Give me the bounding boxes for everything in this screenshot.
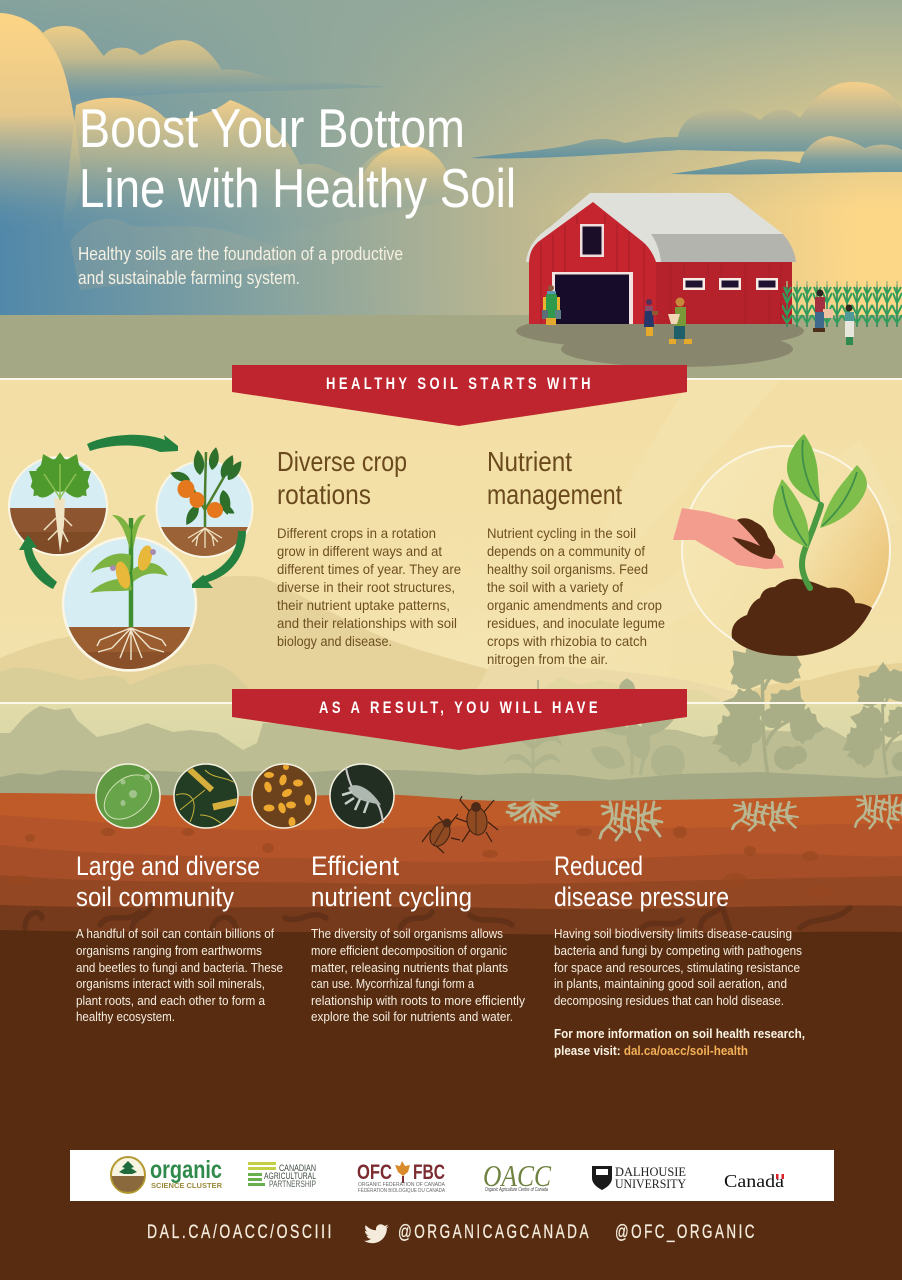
farmer with buckets	[542, 285, 561, 325]
plant roots	[507, 796, 902, 840]
logo: canadian agricultural partnership	[248, 1162, 316, 1189]
text: nutrient management: crops with rhizobia to catch	[487, 633, 647, 649]
text: efficient nutrient cycling: explore the soil for nutrients and water.	[311, 1010, 513, 1024]
logo: canadian agricultural partnership: PARTNERSHIP	[269, 1179, 316, 1189]
title	[79, 97, 516, 219]
logo: canadian agricultural partnership: CANADIAN	[279, 1163, 316, 1173]
barn shadow	[516, 313, 804, 367]
icon: twitter bird	[364, 1224, 389, 1243]
banner: as a result	[232, 689, 687, 750]
clouds right	[470, 82, 902, 175]
text: efficient nutrient cycling: can use. Mycorrhizal fungi form a	[311, 977, 474, 991]
farmer with crate	[813, 290, 833, 332]
more information link: For more information on soil health research,	[554, 1027, 805, 1041]
logo: organic science cluster	[111, 1156, 223, 1193]
text: large and diverse soil community	[76, 851, 283, 1024]
clouds left	[0, 13, 452, 290]
circle: parsnip	[8, 452, 108, 556]
farmer with basket	[668, 298, 692, 344]
logo: OFC FBC: FBC	[413, 1161, 445, 1184]
title: Boost Your Bottom	[79, 97, 465, 159]
text: diverse crop rotations: rotations	[277, 479, 371, 510]
text: efficient nutrient cycling: nutrient cycling	[311, 882, 472, 912]
microbe circles	[96, 764, 394, 828]
logo: OACC: Organic Agriculture Centre of Canada	[485, 1187, 548, 1193]
distant hills	[0, 576, 902, 703]
text: nutrient management: depends on a community of	[487, 543, 645, 559]
logo: organic science cluster: organic	[150, 1156, 222, 1184]
sky top tint	[0, 0, 902, 210]
text: efficient nutrient cycling	[311, 851, 526, 1024]
logo: OACC: OACC	[483, 1158, 551, 1193]
circle: pepper plant	[156, 447, 254, 558]
seedling circle	[682, 446, 890, 654]
logo: Dalhousie University: DALHOUSIE	[615, 1165, 686, 1179]
logo: canadian agricultural partnership: AGRICULTURAL	[264, 1171, 316, 1181]
microbe: bacteria	[252, 764, 316, 828]
banner: healthy soil starts with: HEALTHY SOIL STARTS WITH	[326, 374, 594, 393]
stem and leaves	[773, 434, 867, 588]
text: reduced disease pressure: bacteria and fungi by competing with pathogens	[554, 944, 802, 958]
text: reduced disease pressure: Reduced	[554, 851, 643, 881]
logo: Dalhousie University: UNIVERSITY	[615, 1177, 686, 1191]
more information link	[554, 1027, 805, 1058]
text: reduced disease pressure: in plants, maintaining good soil aeration, and	[554, 977, 787, 991]
text: nutrient management: residues, and inoculate legume	[487, 615, 665, 631]
text: nutrient management: nitrogen from the air.	[487, 651, 608, 667]
text: reduced disease pressure: Having soil biodiversity limits disease-causing	[554, 927, 792, 941]
background tree line	[0, 706, 902, 782]
microbe: green cell	[96, 764, 160, 828]
banner: healthy soil starts with	[232, 365, 687, 426]
text: efficient nutrient cycling: matter, releasing nutrients that plants	[311, 961, 508, 975]
title: Line with Healthy Soil	[79, 157, 516, 219]
text: reduced disease pressure: decomposing residues that can hold disease.	[554, 994, 784, 1008]
logo: OFC FBC: FÉDÉRATION BIOLOGIQUE DU CANADA	[358, 1187, 445, 1194]
section divider lines	[0, 378, 902, 704]
section background: cream	[0, 380, 902, 703]
sky background	[0, 0, 902, 316]
subtitle	[78, 244, 403, 288]
text: large and diverse soil community: organisms ranging from earthworms	[76, 944, 262, 958]
text: large and diverse soil community: plant roots, and each other to form a	[76, 994, 265, 1008]
footer links: @ORGANICAGCANADA	[398, 1222, 591, 1243]
text: efficient nutrient cycling: Efficient	[311, 851, 399, 881]
logo: organic science cluster: SCIENCE CLUSTER	[151, 1181, 223, 1190]
text: diverse crop rotations: and their relationships with soil	[277, 615, 457, 631]
microbe: fungal hyphae	[174, 764, 240, 828]
microbe: springtail	[330, 764, 394, 828]
footer links	[147, 1222, 757, 1243]
text: diverse crop rotations: grow in different ways and at	[277, 543, 442, 559]
text: efficient nutrient cycling: relationship with roots to more efficiently	[311, 994, 526, 1008]
text: diverse crop rotations: their nutrient uptake patterns,	[277, 597, 450, 613]
silhouette plant right large	[703, 626, 902, 775]
text: diverse crop rotations: diverse in their root structures,	[277, 579, 455, 595]
arrows: rotation	[19, 435, 246, 589]
text: efficient nutrient cycling: more efficient decomposition of organic	[311, 944, 507, 958]
text: diverse crop rotations: Different crops in a rotation	[277, 525, 436, 541]
silhouette plants	[503, 678, 689, 779]
text: large and diverse soil community: soil community	[76, 882, 234, 912]
text: large and diverse soil community: healthy ecosystem.	[76, 1010, 175, 1024]
farmer in apron	[845, 304, 854, 345]
footer links: DAL.CA/OACC/OSCIII	[147, 1222, 334, 1243]
field	[0, 315, 902, 379]
crop rotation diagram	[0, 435, 260, 677]
logo: OFC FBC	[357, 1161, 445, 1194]
text: reduced disease pressure: for space and resources, stimulating resistance	[554, 961, 800, 975]
soil mound	[732, 579, 872, 656]
sun rays	[250, 380, 902, 703]
text: diverse crop rotations: different times of year. They are	[277, 561, 461, 577]
logo: OFC FBC: OFC	[357, 1161, 392, 1184]
banner: as a result: AS A RESULT, YOU WILL HAVE	[319, 698, 601, 717]
text: diverse crop rotations	[277, 446, 461, 649]
beetles	[422, 796, 498, 853]
text: reduced disease pressure: disease pressure	[554, 882, 729, 912]
barn scene	[516, 193, 902, 367]
logo: Dalhousie University	[592, 1165, 686, 1191]
section background: result area	[0, 703, 902, 783]
text: nutrient management: organic amendments and crop	[487, 597, 662, 613]
text: nutrient management: management	[487, 479, 622, 510]
soil worms	[25, 905, 850, 930]
logo: OFC FBC: ORGANIC FEDERATION OF CANADA	[358, 1182, 445, 1188]
corn field	[782, 281, 902, 327]
footer links: @OFC_ORGANIC	[615, 1222, 757, 1243]
text: diverse crop rotations: Diverse crop	[277, 446, 407, 477]
illustration: hand and seedling	[673, 434, 890, 656]
text: nutrient management: the soil with a variety of	[487, 579, 623, 595]
text: efficient nutrient cycling: The diversity of soil organisms allows	[311, 927, 503, 941]
text: large and diverse soil community: organisms interact with soil minerals,	[76, 977, 265, 991]
barn	[526, 193, 796, 324]
subtitle: and sustainable farming system.	[78, 268, 300, 288]
hand holding soil	[673, 508, 784, 569]
soil pebbles	[10, 826, 832, 898]
text: reduced disease pressure	[554, 851, 802, 1008]
text: large and diverse soil community: Large and diverse	[76, 851, 260, 881]
logo: Canada wordmark: Canada	[724, 1171, 784, 1191]
text: large and diverse soil community: and beetles to fungi and bacteria. These	[76, 961, 283, 975]
logo strip	[70, 1150, 834, 1201]
circle: corn	[60, 515, 200, 677]
text: diverse crop rotations: biology and disease.	[277, 633, 392, 649]
grass band	[0, 770, 902, 802]
more information link: please visit: dal.ca/oacc/soil-health	[554, 1044, 748, 1058]
text: nutrient management: Nutrient cycling in the soil	[487, 525, 636, 541]
subtitle: Healthy soils are the foundation of a productive	[78, 244, 403, 264]
text: large and diverse soil community: A handful of soil can contain billions of	[76, 927, 274, 941]
text: nutrient management: healthy soil organisms. Feed	[487, 561, 648, 577]
text: nutrient management: Nutrient	[487, 446, 572, 477]
text: nutrient management	[487, 446, 665, 667]
farmer child	[644, 299, 658, 336]
soil layers	[0, 793, 902, 1280]
